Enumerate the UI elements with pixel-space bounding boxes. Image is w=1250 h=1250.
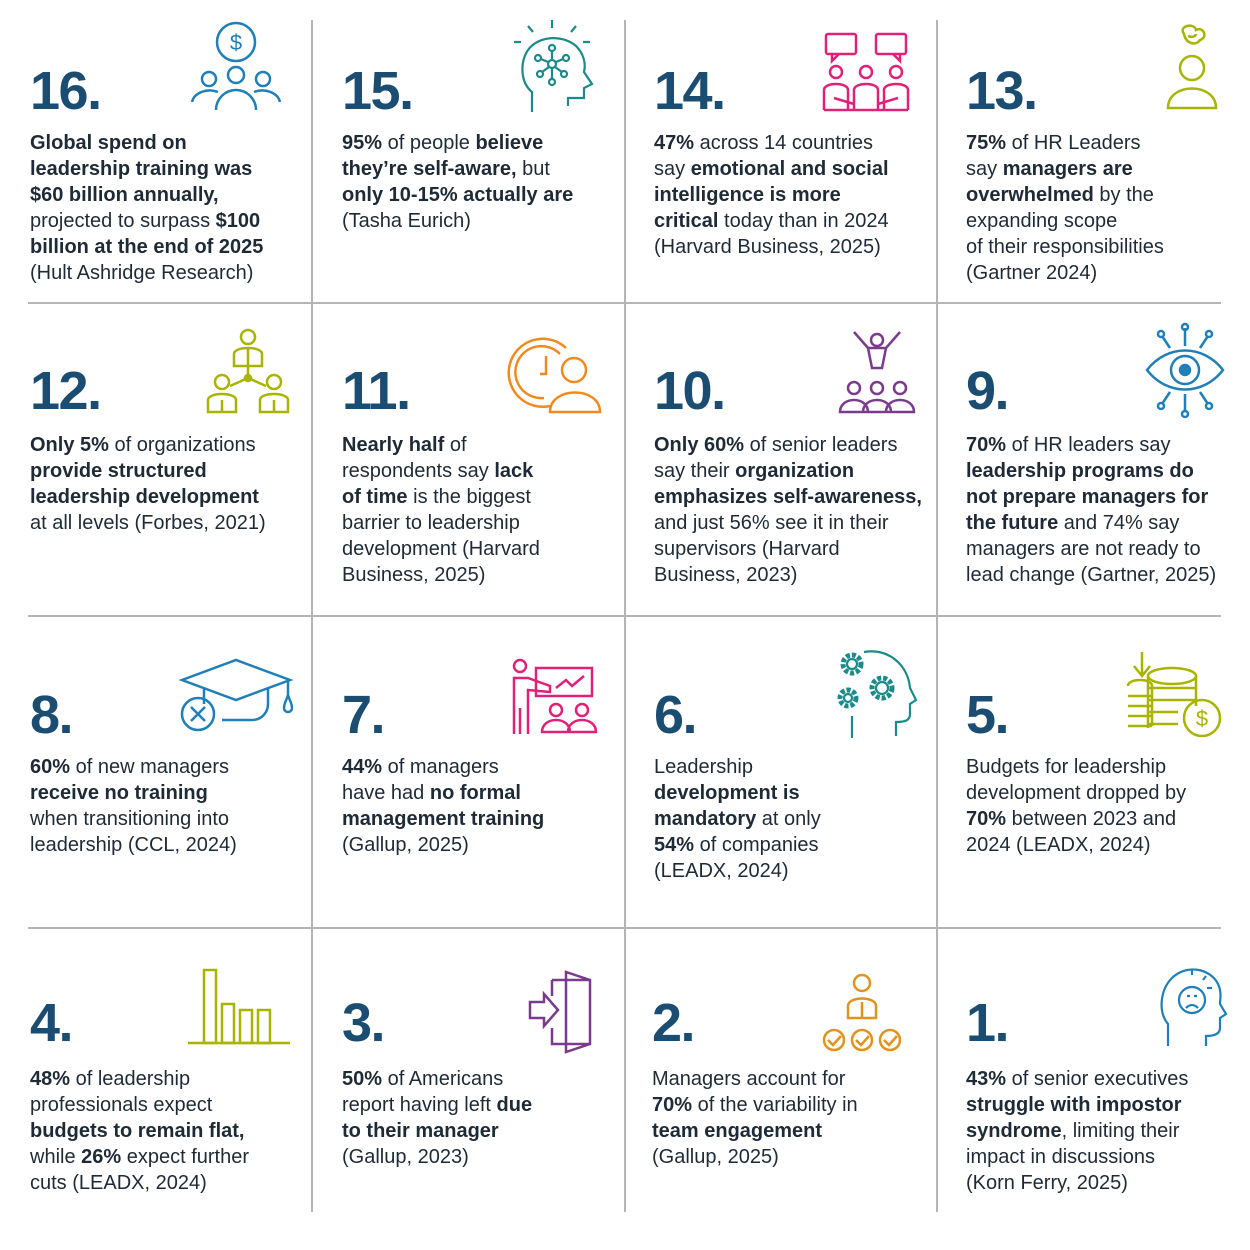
text 2: (Gallup, 2025) [652, 1146, 779, 1168]
text 9 [966, 434, 1216, 586]
text 12: leadership development [30, 486, 259, 508]
text 14 [654, 132, 889, 258]
text 11: barrier to leadership [342, 512, 520, 534]
icon: presenter [512, 658, 598, 734]
icon: coins [1126, 652, 1222, 738]
icon: org structure [206, 328, 290, 414]
icon: exit door [528, 966, 594, 1058]
icon: brain network head [514, 20, 594, 112]
icon: eye network [1146, 322, 1224, 418]
text 8: when transitioning into [30, 808, 229, 830]
text 2 [652, 1066, 858, 1170]
text 16 [30, 132, 263, 284]
text 9: leadership programs do [966, 460, 1194, 482]
text 6 [654, 756, 821, 882]
text 8: leadership (CCL, 2024) [30, 834, 237, 856]
text 15: (Tasha Eurich) [342, 210, 471, 232]
cell 14 [654, 32, 910, 258]
number 15: 15. [342, 61, 413, 121]
text 11: development (Harvard [342, 538, 540, 560]
text 7: (Gallup, 2025) [342, 834, 469, 856]
text 9: lead change (Gartner, 2025) [966, 564, 1216, 586]
cell 15 [342, 20, 594, 232]
text 4 [30, 1068, 249, 1194]
text 1: impact in discussions [966, 1146, 1155, 1168]
text 10: say their organization [654, 460, 854, 482]
text 1 [966, 1066, 1188, 1196]
icon: coins: $ [1196, 706, 1208, 731]
cell 4 [30, 968, 290, 1194]
text 9: 70% of HR leaders say [966, 434, 1171, 456]
text 4: 48% of leadership [30, 1068, 190, 1090]
text 5 [966, 756, 1186, 856]
text 10: supervisors (Harvard [654, 538, 840, 560]
number 10: 10. [654, 361, 725, 421]
number 1: 1. [966, 993, 1008, 1053]
text 16: projected to surpass $100 [30, 210, 260, 232]
text 16: Global spend on [30, 132, 187, 154]
text 3: report having left due [342, 1094, 532, 1116]
text 10: Business, 2023) [654, 564, 797, 586]
text 15: only 10-15% actually are [342, 184, 573, 206]
number 6: 6. [654, 685, 696, 745]
text 8: receive no training [30, 782, 208, 804]
icon: leader above crowd [838, 331, 916, 414]
cell 9 [966, 322, 1224, 586]
number 11: 11. [342, 361, 410, 421]
icon: conversation people [822, 32, 910, 112]
text 6: Leadership [654, 756, 753, 778]
number 9: 9. [966, 361, 1008, 421]
text 10: emphasizes self-awareness, [654, 486, 922, 508]
cell 6 [654, 650, 918, 882]
text 4: professionals expect [30, 1094, 212, 1116]
text 4: cuts (LEADX, 2024) [30, 1172, 207, 1194]
text 9: not prepare managers for [966, 486, 1208, 508]
text 14: critical today than in 2024 [654, 210, 889, 232]
icon: bar chart [188, 968, 290, 1044]
number 2: 2. [652, 993, 694, 1053]
text 13: of their responsibilities [966, 236, 1164, 258]
cell 12 [30, 328, 290, 534]
text 2: Managers account for [652, 1068, 845, 1090]
text 2: 70% of the variability in [652, 1094, 858, 1116]
text 16: billion at the end of 2025 [30, 236, 263, 258]
text 6: (LEADX, 2024) [654, 860, 789, 882]
number 4: 4. [30, 993, 72, 1053]
cell 3 [342, 970, 592, 1168]
cell 16 [30, 22, 282, 284]
number 3: 3. [342, 993, 384, 1053]
text 11: of time is the biggest [342, 486, 531, 508]
number 14: 14. [654, 61, 725, 121]
icon: money people: $ [230, 30, 242, 55]
text 7: 44% of managers [342, 756, 499, 778]
text 1: struggle with impostor [966, 1094, 1182, 1116]
text 15: they’re self-aware, but [342, 158, 550, 180]
text 8: 60% of new managers [30, 756, 229, 778]
text 16: leadership training was [30, 158, 252, 180]
text 9: managers are not ready to [966, 538, 1201, 560]
text 4: budgets to remain flat, [30, 1120, 244, 1142]
text 16: $60 billion annually, [30, 184, 219, 206]
icon: anxious head [1160, 962, 1226, 1048]
text 5: Budgets for leadership [966, 756, 1166, 778]
text 13: say managers are [966, 158, 1133, 180]
text 8 [30, 756, 237, 856]
icon: overwhelmed person [1166, 24, 1218, 110]
number 16: 16. [30, 61, 101, 121]
text 12 [30, 434, 266, 534]
text 7: management training [342, 808, 544, 830]
text 13 [966, 132, 1164, 284]
text 13: expanding scope [966, 210, 1117, 232]
text 16: (Hult Ashridge Research) [30, 262, 253, 284]
text 11: respondents say lack [342, 460, 533, 482]
text 1: 43% of senior executives [966, 1068, 1188, 1090]
text 1: syndrome, limiting their [966, 1120, 1179, 1142]
cell 5 [966, 652, 1222, 856]
number 7: 7. [342, 685, 384, 745]
cell 8 [30, 658, 294, 856]
text 3 [342, 1066, 532, 1170]
cell 13 [966, 24, 1218, 284]
icon: money people [190, 22, 282, 110]
number 8: 8. [30, 685, 72, 745]
text 10: Only 60% of senior leaders [654, 434, 897, 456]
text 12: at all levels (Forbes, 2021) [30, 512, 266, 534]
cell 1 [966, 948, 1250, 1248]
text 11 [342, 434, 540, 586]
text 5: 2024 (LEADX, 2024) [966, 834, 1151, 856]
text 14: intelligence is more [654, 184, 841, 206]
text 11: Business, 2025) [342, 564, 485, 586]
text 14: say emotional and social [654, 158, 889, 180]
number 12: 12. [30, 361, 101, 421]
cell 7 [342, 658, 598, 856]
icon: gears head [838, 650, 918, 738]
text 12: Only 5% of organizations [30, 434, 256, 456]
icon: clock person [507, 338, 602, 414]
text 13: overwhelmed by the [966, 184, 1154, 206]
text 10 [654, 434, 922, 586]
text 11: Nearly half of [342, 434, 467, 456]
text 15: 95% of people believe [342, 132, 543, 154]
text 2: team engagement [652, 1120, 822, 1142]
cell 11 [342, 338, 602, 586]
text 9: the future and 74% say [966, 512, 1179, 534]
number 13: 13. [966, 61, 1037, 121]
text 14: (Harvard Business, 2025) [654, 236, 881, 258]
cell 10 [654, 331, 922, 586]
text 3: (Gallup, 2023) [342, 1146, 469, 1168]
text 1: (Korn Ferry, 2025) [966, 1172, 1128, 1194]
text 6: mandatory at only [654, 808, 821, 830]
text 10: and just 56% see it in their [654, 512, 889, 534]
text 15 [342, 132, 573, 232]
text 3: 50% of Americans [342, 1068, 503, 1090]
text 5: development dropped by [966, 782, 1186, 804]
icon: manager checks [822, 974, 902, 1052]
text 4: while 26% expect further [30, 1146, 249, 1168]
text 13: 75% of HR Leaders [966, 132, 1141, 154]
text 7 [342, 756, 544, 856]
text 5: 70% between 2023 and [966, 808, 1176, 830]
number 5: 5. [966, 685, 1008, 745]
text 12: provide structured [30, 460, 207, 482]
text 13: (Gartner 2024) [966, 262, 1097, 284]
text 3: to their manager [342, 1120, 499, 1142]
text 6: development is [654, 782, 800, 804]
text 14: 47% across 14 countries [654, 132, 873, 154]
text 6: 54% of companies [654, 834, 819, 856]
cell 2 [652, 948, 942, 1248]
text 7: have had no formal [342, 782, 521, 804]
icon: grad cap x [178, 658, 294, 732]
